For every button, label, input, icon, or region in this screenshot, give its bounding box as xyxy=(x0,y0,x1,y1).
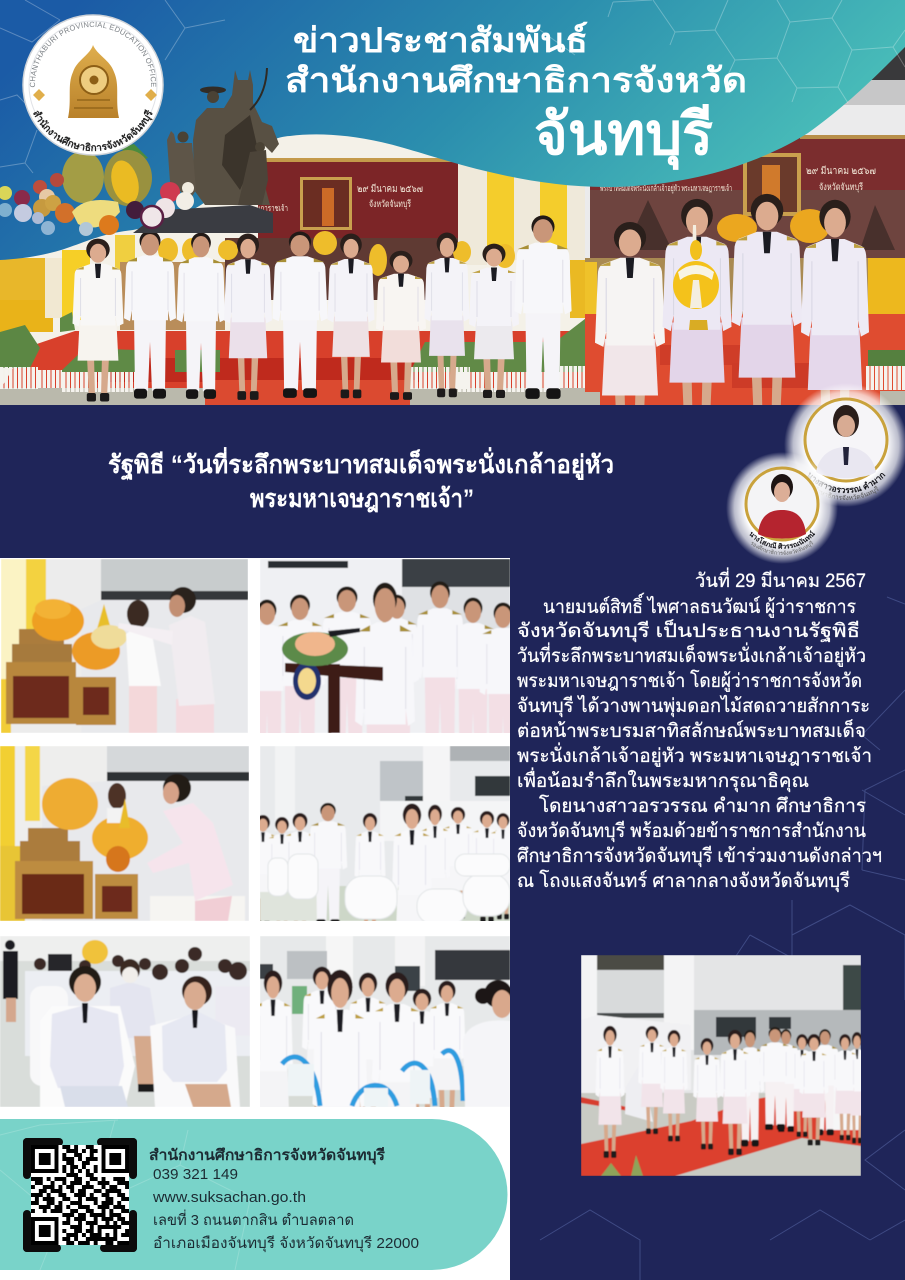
banner left: ษฎาราชเจ้า xyxy=(256,203,288,213)
panel: header photo banner xyxy=(0,47,905,405)
text block: news article: พระมหาเจษฎาราชเจ้า โดยผู้ว่าราชการจังหวัด xyxy=(517,669,862,692)
portrait: education officer: นางสาวอรวรรณ คำมาก xyxy=(808,472,886,494)
QR code xyxy=(23,1138,137,1252)
right photo background xyxy=(585,47,905,405)
contact text: 039 321 149 xyxy=(153,1166,238,1183)
title: public relations news: ข่าวประชาสัมพันธ์ xyxy=(293,21,588,60)
contact text: www.suksachan.go.th xyxy=(152,1189,306,1206)
text block: news article: จันทบุรี ได้วางพานพุ่มดอกไม้สดถวายสักการะ xyxy=(517,695,870,718)
panel: contact information xyxy=(0,1119,508,1270)
logo: provincial education office seal: CHANTHABURI PROVINCIAL EDUCATION OFFICE xyxy=(30,22,156,88)
heading: royal ceremony name xyxy=(108,447,614,513)
text block: news article: วันที่ 29 มีนาคม 2567 xyxy=(695,567,866,592)
text block: news article: ศึกษาธิการจังหวัดจันทบุรี เข้าร่วมงานดังกล่าวฯ xyxy=(517,845,882,868)
left group of officials xyxy=(72,215,572,402)
contact text: อำเภอเมืองจันทบุรี จังหวัดจันทบุรี 22000 xyxy=(153,1235,419,1253)
photo: governor at lectern xyxy=(260,559,510,733)
photo: officials on red carpet xyxy=(581,955,861,1176)
text block: news article: จังหวัดจันทบุรี พร้อมด้วยข้าราชการสำนักงาน xyxy=(517,820,866,843)
text block: news article: ต่อหน้าพระบรมสาทิสลักษณ์พระบาทสมเด็จ xyxy=(517,718,866,742)
heading: royal ceremony name: พระมหาเจษฎาราชเจ้า” xyxy=(250,485,474,513)
navy content background xyxy=(0,405,905,1280)
title: public relations news: สำนักงานศึกษาธิการจังหวัด xyxy=(285,62,747,100)
statue of King Taksin xyxy=(133,68,279,233)
banner left: จังหวัดจันทบุรี xyxy=(369,198,411,210)
wave header shape xyxy=(0,0,905,260)
fruit cluster xyxy=(0,135,194,236)
honeycomb lines in header xyxy=(0,0,905,173)
banner left xyxy=(225,158,458,300)
banner left: ๒๙ มีนาคม ๒๕๖๗ xyxy=(357,183,423,195)
white picket fences xyxy=(0,377,590,382)
heading: royal ceremony name: รัฐพิธี “วันที่ระลึกพระบาทสมเด็จพระนั่งเกล้าอยู่หัว xyxy=(108,447,614,481)
right photo background: จังหวัดจันทบุรี xyxy=(819,181,863,193)
right photo background: พระบาทสมเด็จพระนั่งเกล้าเจ้าอยู่หัว พระมหาเจษฎาราชเจ้า xyxy=(600,182,732,194)
right group of officials xyxy=(595,194,869,405)
text block: news article: พระนั่งเกล้าเจ้าอยู่หัว พระมหาเจษฎาราชเจ้า xyxy=(517,742,872,767)
text block: news article: โดยนางสาวอรวรรณ คำมาก ศึกษาธิการ xyxy=(539,794,866,817)
right photo background: ๒๙ มีนาคม ๒๕๖๗ xyxy=(806,165,876,177)
flower offering xyxy=(673,225,719,330)
portrait: deputy education officer: รองศึกษาธิการจังหวัดจันทบุรี xyxy=(751,540,814,555)
photo: governor offering flowers xyxy=(1,559,248,733)
text block: news article xyxy=(517,567,882,893)
photo: officials standing in hall xyxy=(260,746,510,921)
title: public relations news: จันทบุรี xyxy=(534,102,713,171)
contact text xyxy=(149,1146,419,1253)
text block: news article: จังหวัดจันทบุรี เป็นประธานงานรัฐพิธี xyxy=(517,618,860,643)
contact text: สำนักงานศึกษาธิการจังหวัดจันทบุรี xyxy=(149,1146,386,1165)
text block: news article: ณ โถงแสงจันทร์ ศาลากลางจังหวัดจันทบุรี xyxy=(517,869,850,893)
honeycomb lines on navy xyxy=(540,597,905,1280)
emblem xyxy=(68,45,119,118)
photo: education officer offering flowers xyxy=(0,746,249,921)
portrait: education officer xyxy=(784,386,905,506)
text block: news article: วันที่ระลึกพระบาทสมเด็จพระนั่งเกล้าเจ้าอยู่หัว xyxy=(517,642,866,667)
logo: provincial education office seal: สำนักงานศึกษาธิการจังหวัดจันทบุรี xyxy=(33,109,153,152)
portrait: deputy education officer xyxy=(726,452,838,564)
contact text: เลขที่ 3 ถนนตากสิน ตำบลตลาด xyxy=(153,1209,354,1229)
photo: seated officials xyxy=(0,936,250,1107)
portrait: education officer: ศึกษาธิการจังหวัดจันทบุรี xyxy=(816,486,878,500)
title: public relations news xyxy=(285,21,747,171)
photo: officials with blue chairs xyxy=(260,936,510,1107)
portrait: deputy education officer: นางโสภณี ศิวรรณนันทน์ xyxy=(750,530,816,549)
text block: news article: นายมนต์สิทธิ์ ไพศาลธนวัฒน์ ผู้ว่าราชการ xyxy=(543,592,856,618)
text block: news article: เพื่อน้อมรำลึกในพระมหากรุณาธิคุณ xyxy=(517,767,809,793)
logo: provincial education office seal xyxy=(22,14,164,156)
